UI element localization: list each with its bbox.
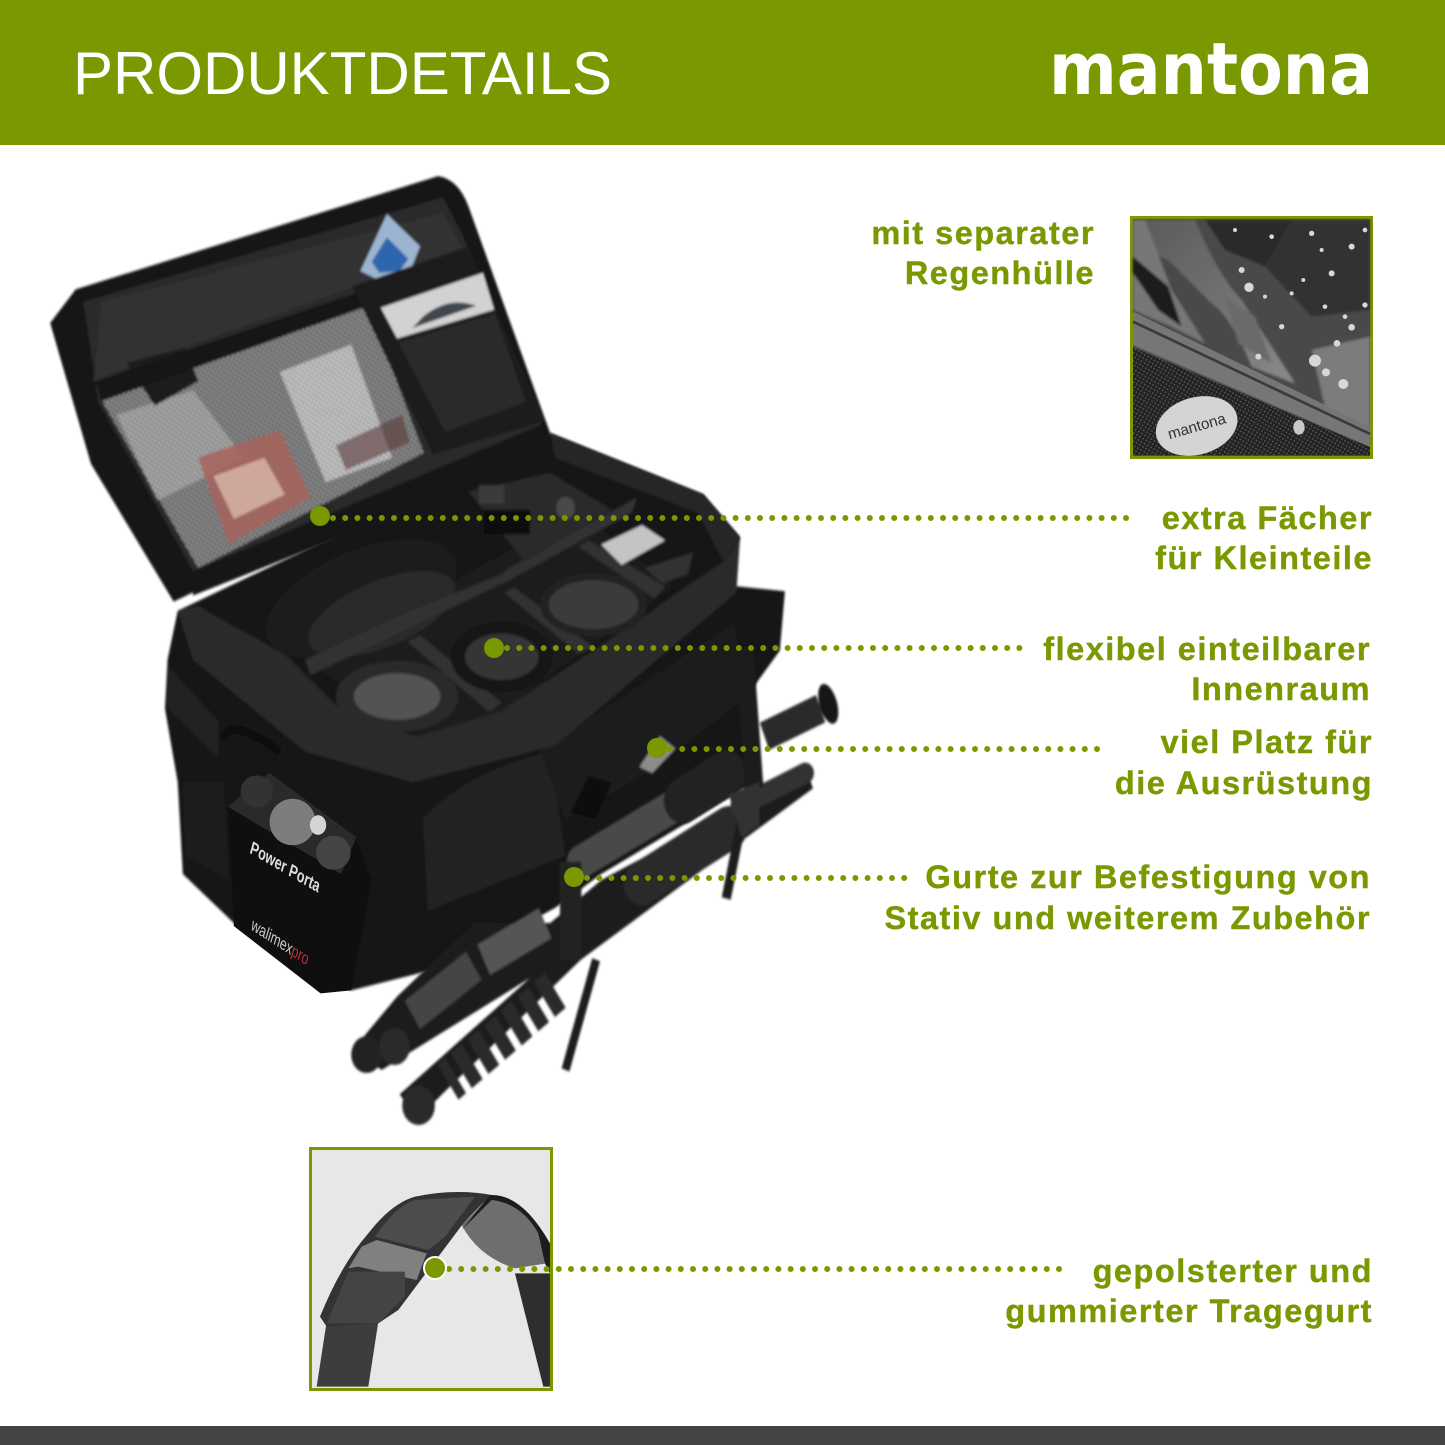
callout: extra compartments: extra Fächer	[1162, 500, 1373, 536]
rubber pad	[320, 1192, 492, 1327]
callout: padded strap	[424, 1253, 1373, 1329]
filter pocket	[352, 247, 545, 455]
power pack	[228, 773, 372, 993]
water drop on zipper	[1293, 420, 1305, 435]
power pack brand: walimexpro	[248, 915, 311, 970]
brand logo: mantona	[1049, 27, 1373, 111]
callout: plenty of room: die Ausrüstung	[1115, 765, 1373, 801]
callout: extra compartments: für Kleinteile	[1155, 540, 1373, 576]
bag body	[165, 433, 785, 990]
flash unit	[601, 525, 665, 565]
tripod strapped to the bag	[351, 648, 842, 1125]
label: rain cover line 2: Regenhülle	[905, 255, 1095, 291]
callout: tripod straps	[564, 859, 1371, 936]
strap webbing	[317, 1322, 378, 1387]
callout: plenty of room: viel Platz für	[1161, 724, 1373, 760]
callout: tripod straps: Stativ und weiterem Zubehör	[884, 900, 1371, 936]
padded underside	[462, 1197, 547, 1268]
callout: flexible interior: Innenraum	[1191, 671, 1371, 707]
carbon fabric	[1133, 347, 1370, 455]
callout: flexible interior	[484, 631, 1371, 707]
callout: extra compartments	[310, 500, 1373, 576]
footer band	[0, 1426, 1445, 1445]
callout: plenty of room	[647, 724, 1373, 801]
callout: tripod straps: Gurte zur Befestigung von	[925, 859, 1371, 895]
power pack label: Power Porta	[248, 839, 322, 897]
inset: shoulder strap	[310, 1148, 552, 1390]
lens pouch	[254, 515, 469, 682]
interior compartments	[208, 433, 740, 736]
lens caps	[336, 573, 647, 732]
callout: padded strap: gepolsterter und	[1093, 1253, 1373, 1289]
water droplets	[1233, 228, 1368, 389]
dividers	[305, 498, 665, 712]
product photo: camera bag with tripod	[50, 176, 842, 1125]
label: rain cover: mit separater	[871, 215, 1095, 251]
bag lid	[50, 176, 550, 602]
header band	[0, 0, 1445, 145]
inset: rain cover	[1132, 218, 1372, 465]
callout: padded strap: gummierter Tragegurt	[1005, 1293, 1373, 1329]
mantona badge: mantona	[1166, 410, 1228, 443]
title: PRODUKTDETAILS	[73, 40, 612, 107]
zipper strip	[1133, 312, 1370, 447]
lid mesh pocket	[96, 289, 424, 568]
camera	[469, 473, 611, 562]
blue accessory packet	[360, 214, 420, 279]
callout: flexible interior: flexibel einteilbarer	[1043, 631, 1371, 667]
rain cover fabric folds	[1133, 220, 1370, 443]
mantona badge	[1149, 387, 1245, 465]
